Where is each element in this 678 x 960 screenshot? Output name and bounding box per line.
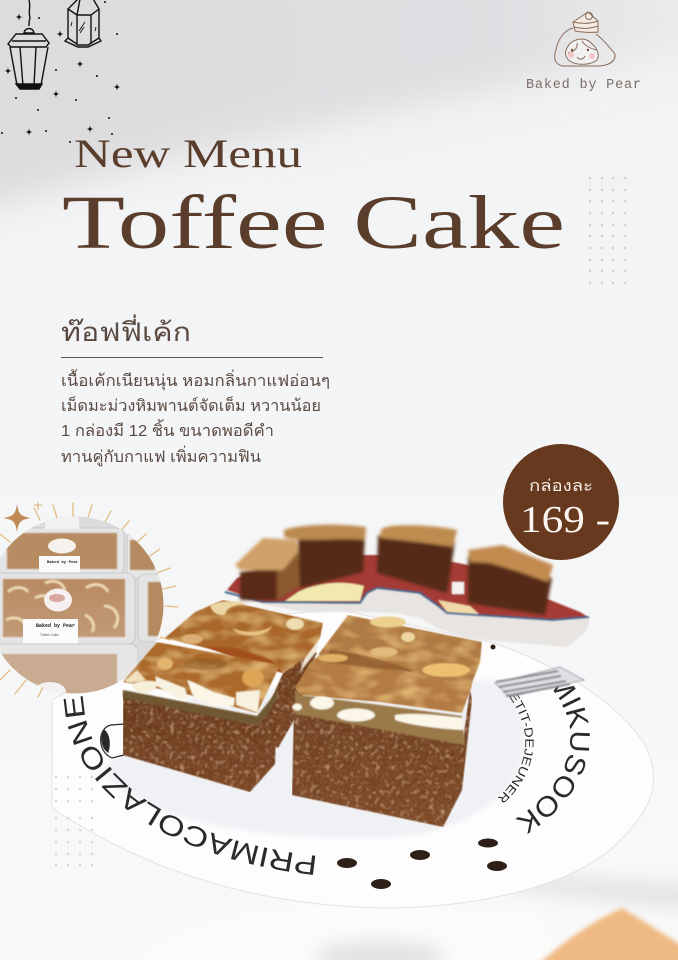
description text: ทานคู่กับกาแฟ เพิ่มความฟิน [61,445,261,467]
logo: Baked by Pear [526,12,641,93]
fork [495,667,584,697]
plate lettering: MIKUSOOK [515,686,590,834]
stars [1,1,121,143]
photo [0,515,170,704]
Thai heading: ท๊อฟฟี่เค้ก [61,314,191,347]
main cakes [123,600,482,827]
back left cake [165,600,323,748]
front left cake [123,642,280,792]
middle box [0,573,135,645]
coffee cup icon [101,724,124,758]
price badge: 169 - [520,499,610,541]
photo: Baked by Pear [47,560,79,565]
dot grid top right [589,177,626,284]
price badge: กล่องละ [529,478,593,495]
lower box [0,644,138,682]
title: New Menu: New Menu [74,131,302,176]
plate lettering [64,686,590,875]
icon: girl with cake on head [555,12,615,66]
back dish with cakes [225,525,589,647]
icon: sparkle [3,504,31,532]
plate lettering: PETIT-DEJEUNER [498,694,534,802]
price badge [503,444,619,560]
divider line [61,357,323,358]
description text: เม็ดมะม่วงหิมพานต์จัดเต็ม หวานน้อย [61,395,321,415]
description text: เนื้อเค้กเนียนนุ่น หอมกลิ่นกาแฟอ่อนๆ [61,369,330,391]
dish [225,555,589,647]
small dots on plate [337,644,507,889]
decoration: hanging lanterns and stars [1,0,121,143]
plate lettering: PRIMACOLAZIONE [64,696,316,875]
main plate [52,612,654,908]
sun rays [0,503,178,697]
plate well [100,680,524,838]
description text [61,369,330,467]
icon: round lantern [8,0,49,89]
brand name: Baked by Pear [526,78,641,93]
round photo of boxed cakes with sun rays [0,502,178,704]
left faint dot grid [55,776,93,866]
title: Toffee Cake: Toffee Cake [62,181,565,265]
description text: 1 กล่องมี 12 ชิ้น ขนาดพอดีคำ [61,419,274,440]
back cakes [235,525,553,615]
photo: Toffee Cake [40,633,59,637]
icon: small plus [34,502,42,510]
upper box [0,528,124,574]
photo: Baked by Pear [36,623,75,629]
blurred pastry in the foreground [538,908,678,960]
icon: hexagonal lantern [65,0,101,47]
right cake [292,615,482,827]
